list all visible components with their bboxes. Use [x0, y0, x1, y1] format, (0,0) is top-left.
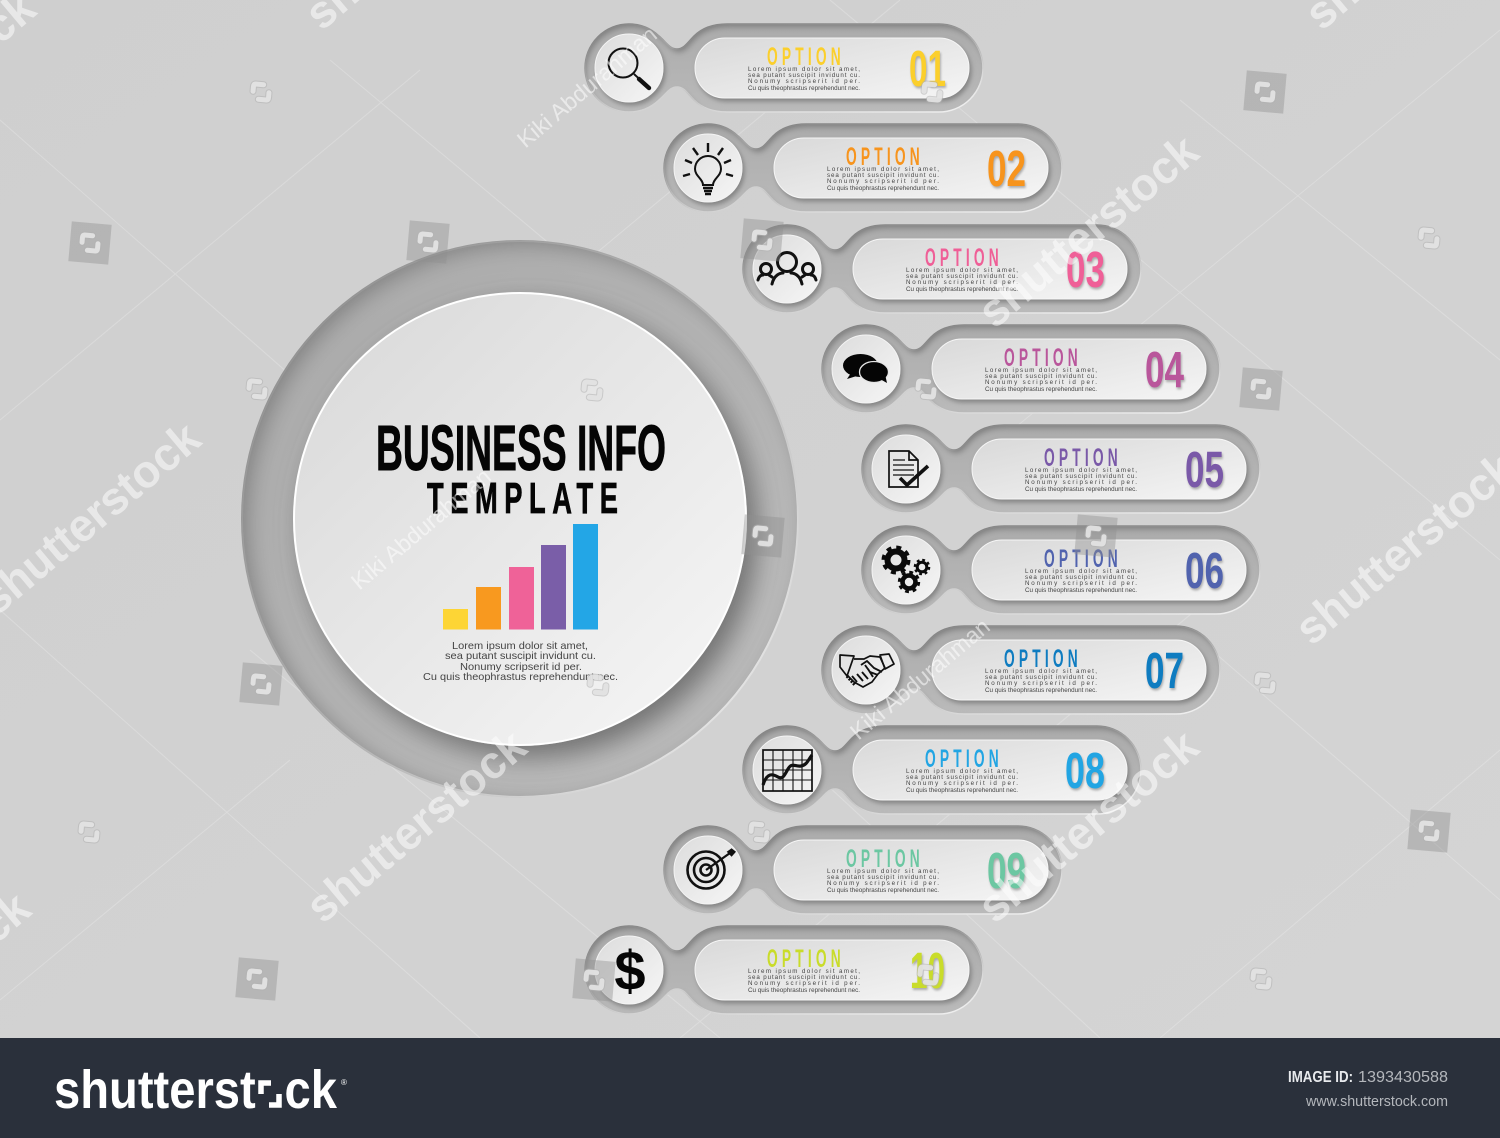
text block	[827, 166, 939, 192]
number: 10	[910, 942, 945, 999]
text block: sea putant suscipit invidunt cu.	[985, 674, 1097, 681]
central description	[423, 641, 618, 683]
icon: chat bubbles	[843, 354, 888, 383]
outer ring	[242, 241, 798, 797]
central description: Lorem ipsum dolor sit amet,	[452, 641, 588, 652]
icon disc	[753, 736, 821, 804]
central description: Nonumy scripserit id per.	[460, 662, 582, 673]
option 06	[862, 526, 1260, 614]
image id number: 1393430588	[1358, 1069, 1448, 1086]
icon disc	[832, 636, 900, 704]
text block: Lorem ipsum dolor sit amet,	[985, 367, 1097, 374]
number: 09	[987, 842, 1026, 899]
number: 06	[1185, 542, 1224, 599]
heading: OPTION	[1004, 345, 1078, 372]
text block: Nonumy scripserit id per.	[1025, 479, 1137, 486]
icon disc	[832, 335, 900, 403]
text block: Nonumy scripserit id per.	[1025, 580, 1137, 587]
title: BUSINESS INFO	[376, 412, 666, 484]
option 08	[743, 726, 1141, 814]
text block: Lorem ipsum dolor sit amet,	[906, 267, 1018, 274]
text block: Cu quis theophrastus reprehendunt nec.	[906, 286, 1018, 293]
option 07	[822, 626, 1220, 714]
label pill	[972, 540, 1246, 600]
heading: OPTION	[846, 144, 920, 171]
bar chart	[443, 524, 598, 630]
icon: target with dart	[688, 848, 736, 888]
registered mark: ®	[341, 1078, 347, 1087]
number: 08	[1065, 742, 1105, 799]
text block: Nonumy scripserit id per.	[985, 379, 1097, 386]
label pill	[932, 339, 1206, 399]
text block	[748, 66, 860, 92]
number: 01	[909, 40, 946, 97]
label pill	[695, 38, 969, 98]
text block	[985, 367, 1097, 393]
number: 03	[1066, 241, 1105, 298]
text block: Lorem ipsum dolor sit amet,	[748, 66, 860, 73]
text block: Nonumy scripserit id per.	[985, 680, 1097, 687]
icon: line chart grid	[763, 750, 812, 791]
label pill	[774, 840, 1048, 900]
capsule	[862, 526, 1260, 614]
icon: document with check	[889, 451, 928, 487]
heading: OPTION	[846, 846, 920, 873]
central circle panel	[242, 241, 798, 797]
icon: gears	[884, 548, 929, 592]
text block: Nonumy scripserit id per.	[748, 78, 860, 85]
watermark overlay: shutterstock	[968, 719, 1208, 932]
heading: OPTION	[1044, 445, 1118, 472]
number: 02	[987, 140, 1026, 197]
label pill	[695, 940, 969, 1000]
text block: sea putant suscipit invidunt cu.	[827, 172, 939, 179]
icon disc	[595, 34, 663, 102]
text block	[985, 668, 1097, 694]
icon: dollar sign: $	[614, 939, 646, 1002]
watermark overlay: Kiki Abdurahman	[845, 613, 995, 745]
option 03	[743, 225, 1141, 313]
watermark overlay: shutterstock	[296, 719, 536, 932]
text block: Lorem ipsum dolor sit amet,	[1025, 467, 1137, 474]
capsule	[585, 926, 983, 1014]
text block: Lorem ipsum dolor sit amet,	[1025, 568, 1137, 575]
text block: sea putant suscipit invidunt cu.	[906, 273, 1018, 280]
label pill	[972, 439, 1246, 499]
icon: light bulb	[683, 143, 733, 194]
heading: OPTION	[767, 44, 841, 71]
text block: Nonumy scripserit id per.	[748, 980, 860, 987]
text block: Cu quis theophrastus reprehendunt nec.	[985, 687, 1097, 694]
icon disc	[674, 836, 742, 904]
text block	[906, 267, 1018, 293]
option 09	[664, 826, 1062, 914]
footer bar	[0, 1038, 1500, 1138]
label pill	[853, 239, 1127, 299]
text block: Lorem ipsum dolor sit amet,	[985, 668, 1097, 675]
capsule	[822, 626, 1220, 714]
text block: Nonumy scripserit id per.	[906, 279, 1018, 286]
text block: Cu quis theophrastus reprehendunt nec.	[1025, 486, 1137, 493]
capsule	[822, 325, 1220, 413]
website: www.shutterstock.com	[1305, 1093, 1448, 1110]
text block: Lorem ipsum dolor sit amet,	[906, 768, 1018, 775]
capsule	[743, 726, 1141, 814]
option 05	[862, 425, 1260, 513]
icon disc	[753, 235, 821, 303]
watermark overlay: shutterstock	[968, 124, 1208, 337]
number: 04	[1145, 341, 1184, 398]
text block: sea putant suscipit invidunt cu.	[1025, 473, 1137, 480]
capsule	[664, 124, 1062, 212]
capsule	[862, 425, 1260, 513]
number: 05	[1185, 441, 1224, 498]
text block: sea putant suscipit invidunt cu.	[906, 774, 1018, 781]
icon disc	[872, 435, 940, 503]
heading: OPTION	[925, 245, 999, 272]
icon: magnifier	[608, 48, 649, 88]
heading: OPTION	[767, 946, 841, 973]
heading: OPTION	[925, 746, 999, 773]
text block: Cu quis theophrastus reprehendunt nec.	[906, 787, 1018, 794]
icon: people	[758, 252, 816, 284]
text block	[1025, 568, 1137, 594]
text block: Nonumy scripserit id per.	[906, 780, 1018, 787]
inner disc	[294, 293, 746, 745]
text block: Lorem ipsum dolor sit amet,	[827, 868, 939, 875]
capsule	[585, 24, 983, 112]
icon: logo bracket	[261, 1083, 279, 1105]
option 10	[585, 926, 983, 1014]
label pill	[932, 640, 1206, 700]
text block: Cu quis theophrastus reprehendunt nec.	[1025, 587, 1137, 594]
text block: Cu quis theophrastus reprehendunt nec.	[827, 185, 939, 192]
subtitle: TEMPLATE	[427, 473, 618, 523]
text block	[827, 868, 939, 894]
option 01	[585, 24, 983, 112]
text block: sea putant suscipit invidunt cu.	[748, 974, 860, 981]
text block: Nonumy scripserit id per.	[827, 880, 939, 887]
text block: Cu quis theophrastus reprehendunt nec.	[748, 987, 860, 994]
icon disc	[674, 134, 742, 202]
text block: sea putant suscipit invidunt cu.	[985, 373, 1097, 380]
icon disc	[872, 536, 940, 604]
text block	[748, 968, 860, 994]
number: 07	[1145, 642, 1184, 699]
text block: Lorem ipsum dolor sit amet,	[827, 166, 939, 173]
heading: OPTION	[1044, 546, 1118, 573]
image id label: IMAGE ID:	[1288, 1069, 1353, 1086]
capsule	[743, 225, 1141, 313]
text block: Cu quis theophrastus reprehendunt nec.	[748, 85, 860, 92]
text block: sea putant suscipit invidunt cu.	[748, 72, 860, 79]
text block: Cu quis theophrastus reprehendunt nec.	[985, 386, 1097, 393]
option 02	[664, 124, 1062, 212]
capsule	[664, 826, 1062, 914]
footer logo: shutterstock	[54, 1060, 338, 1120]
text block: Cu quis theophrastus reprehendunt nec.	[827, 887, 939, 894]
text block	[906, 768, 1018, 794]
text block: sea putant suscipit invidunt cu.	[1025, 574, 1137, 581]
icon: handshake	[840, 654, 894, 687]
watermark overlay: Kiki Abdurahman	[512, 21, 662, 153]
heading: OPTION	[1004, 646, 1078, 673]
central description: Cu quis theophrastus reprehendunt nec.	[423, 672, 618, 683]
text block: sea putant suscipit invidunt cu.	[827, 874, 939, 881]
text block: Lorem ipsum dolor sit amet,	[748, 968, 860, 975]
central description: sea putant suscipit invidunt cu.	[445, 651, 596, 662]
text block	[1025, 467, 1137, 493]
label pill	[774, 138, 1048, 198]
label pill	[853, 740, 1127, 800]
watermark overlay: Kiki Abdurahman	[346, 463, 496, 595]
option 04	[822, 325, 1220, 413]
icon disc	[595, 936, 663, 1004]
text block: Nonumy scripserit id per.	[827, 178, 939, 185]
